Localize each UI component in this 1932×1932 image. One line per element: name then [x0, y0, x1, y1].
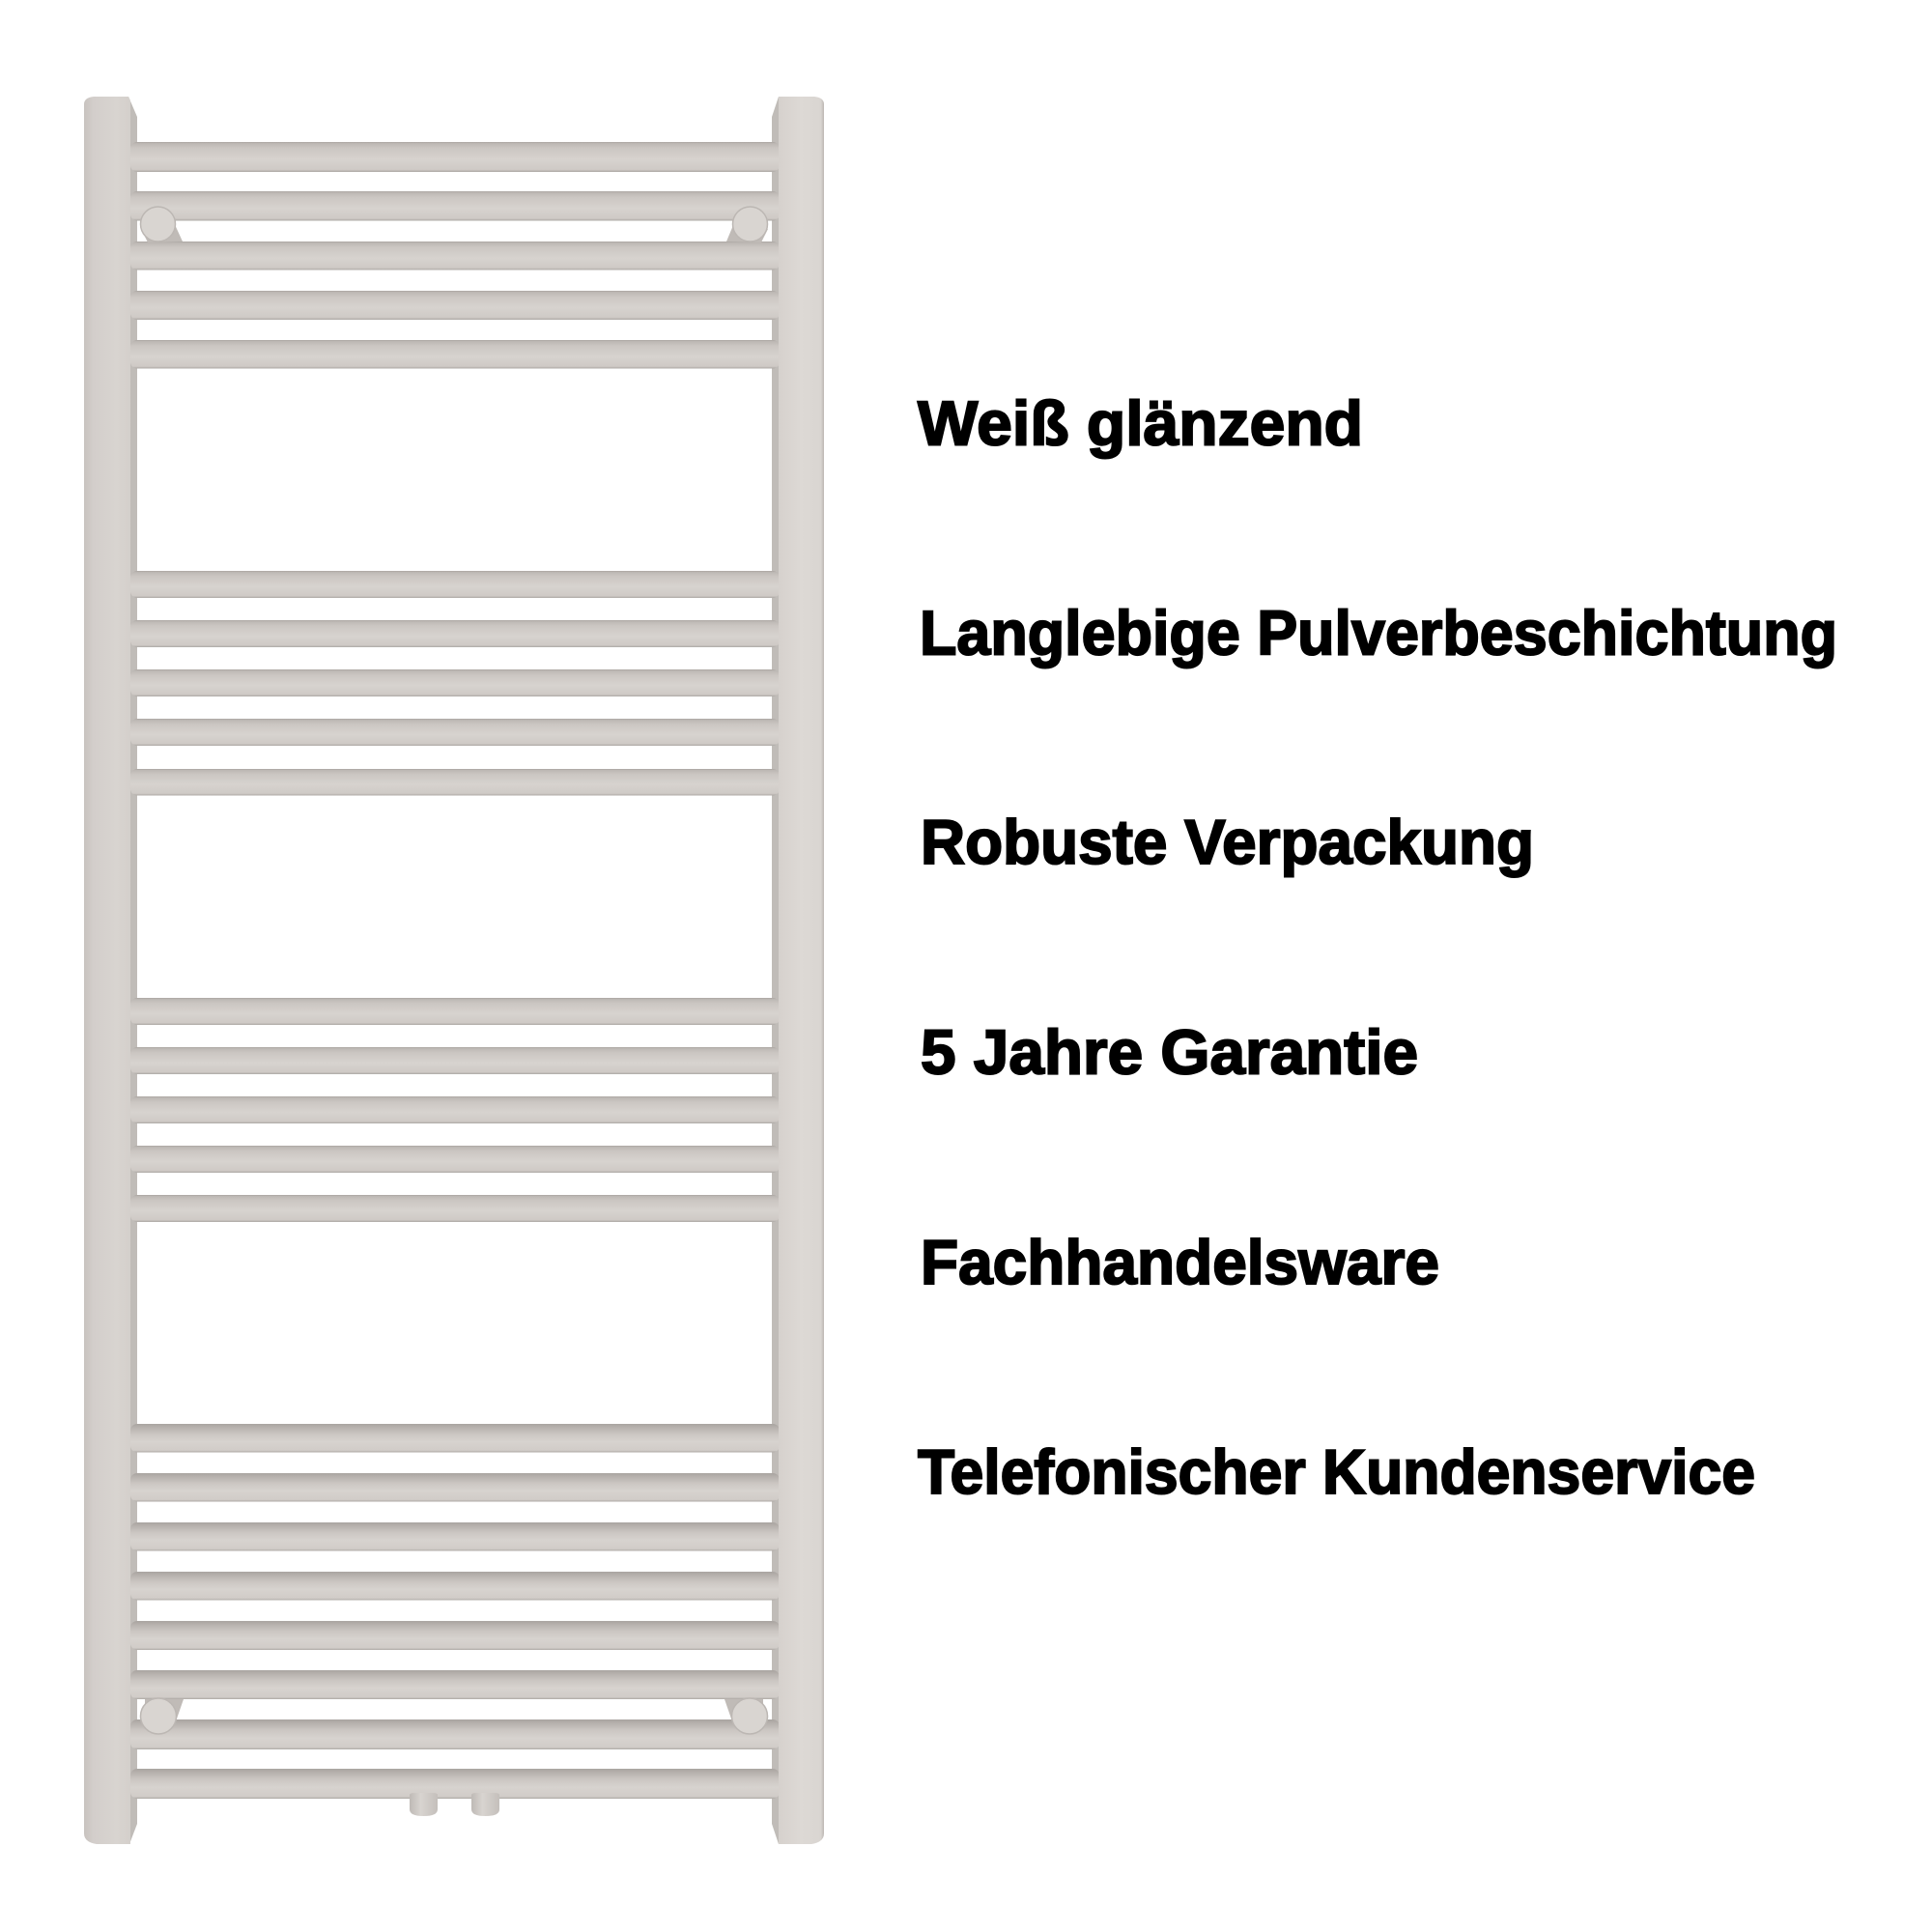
wall bracket bottom left [141, 1698, 184, 1734]
rail group 2 [130, 571, 780, 796]
rail group 3 [130, 998, 780, 1222]
rail group 1 [130, 142, 780, 369]
valve connector right [471, 1793, 499, 1816]
wall bracket top right [726, 207, 768, 242]
feature: 5 Jahre Garantie: 5 Jahre Garantie [921, 1016, 1418, 1088]
feature: Weiß glänzend: Weiß glänzend [918, 388, 1363, 458]
rail group 4 [130, 1424, 780, 1799]
wall bracket bottom right [724, 1698, 767, 1734]
feature: Telefonischer Kundenservice: Telefonischer Kundenservice [918, 1436, 1755, 1507]
right post [779, 97, 824, 1844]
feature list [918, 388, 1837, 1507]
feature: Robuste Verpackung: Robuste Verpackung [921, 807, 1534, 877]
left post [84, 97, 130, 1844]
feature: Langlebige Pulverbeschichtung: Langlebige Pulverbeschichtung [920, 597, 1837, 668]
right post inner strip [772, 97, 779, 1844]
feature: Fachhandelsware: Fachhandelsware [921, 1227, 1439, 1297]
towel radiator [84, 97, 824, 1844]
left post inner strip [128, 97, 137, 1844]
valve connector left [410, 1793, 438, 1816]
wall bracket top left [141, 207, 183, 242]
